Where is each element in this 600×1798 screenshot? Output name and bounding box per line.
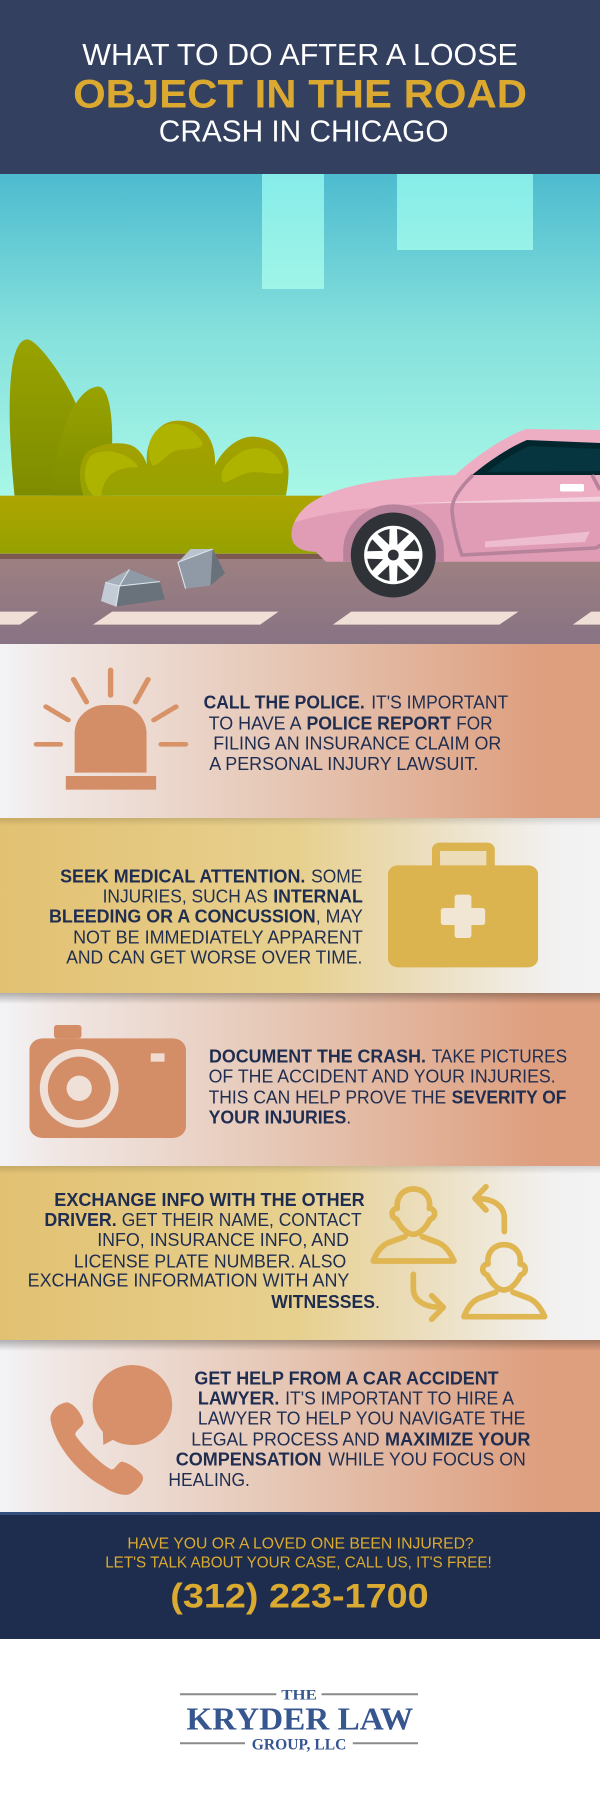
rock right xyxy=(178,549,225,589)
panel: seek medical attention xyxy=(0,818,600,993)
rock left xyxy=(101,569,165,607)
text: document the crash: OF THE ACCIDENT AND YOUR INJURIES. xyxy=(209,1066,556,1086)
text: seek medical attention: , MAY xyxy=(316,906,363,926)
text: call the police xyxy=(204,692,508,774)
text: document the crash: TAKE PICTURES xyxy=(432,1046,567,1066)
text: seek medical attention: SEEK MEDICAL ATTENTION. xyxy=(60,866,305,886)
panel: document the crash xyxy=(0,993,600,1166)
logo: the kryder law group: GROUP, LLC xyxy=(252,1737,346,1754)
text: seek medical attention: INTERNAL xyxy=(273,886,363,906)
sky xyxy=(0,174,600,504)
panel: exchange info xyxy=(0,1166,600,1340)
text: document the crash: YOUR INJURIES xyxy=(209,1107,346,1127)
bush xyxy=(80,421,289,496)
text: get help from a lawyer: IT'S IMPORTANT TO HIRE A xyxy=(285,1388,514,1408)
text: get help from a lawyer: LAWYER TO HELP YOU NAVIGATE THE xyxy=(198,1408,525,1428)
road xyxy=(0,559,600,644)
text: get help from a lawyer xyxy=(168,1368,530,1490)
text: exchange info: GET THEIR NAME, CONTACT xyxy=(122,1210,362,1230)
text: call the police: FILING AN INSURANCE CLAIM OR xyxy=(213,733,501,753)
icon: siren xyxy=(36,670,186,790)
text: get help from a lawyer: GET HELP FROM A CAR ACCIDENT xyxy=(194,1368,499,1388)
text: seek medical attention: NOT BE IMMEDIATELY APPARENT xyxy=(73,927,363,947)
text: call the police: TO HAVE A xyxy=(209,713,302,733)
icon: camera xyxy=(29,1025,186,1138)
logo: the kryder law group: THE xyxy=(281,1688,317,1704)
illustration: road scene xyxy=(0,174,600,644)
curb xyxy=(0,554,600,559)
text: seek medical attention: SOME xyxy=(311,866,362,886)
text: seek medical attention: BLEEDING OR A CONCUSSION xyxy=(49,906,316,926)
icon: first aid kit xyxy=(388,843,538,967)
text: call the police: CALL THE POLICE. xyxy=(204,692,365,712)
tall leaf xyxy=(10,339,92,496)
icon: phone with speech bubble xyxy=(50,1365,172,1495)
sky light panel right xyxy=(397,174,533,250)
header panel xyxy=(0,0,600,174)
text: get help from a lawyer: LEGAL PROCESS AND xyxy=(191,1429,380,1449)
logo: the kryder law group: KRYDER LAW xyxy=(186,1700,413,1736)
title line 2: OBJECT IN THE ROAD xyxy=(73,73,527,117)
car door xyxy=(452,475,600,555)
text: exchange info: EXCHANGE INFO WITH THE OTHER xyxy=(54,1190,365,1210)
panel: call the police xyxy=(0,644,600,818)
title line 3: CRASH IN CHICAGO xyxy=(159,115,449,149)
text: get help from a lawyer: COMPENSATION xyxy=(176,1449,322,1469)
car windshield xyxy=(472,440,600,475)
text: exchange info xyxy=(28,1190,380,1312)
text: seek medical attention: INJURIES, SUCH AS xyxy=(103,886,268,906)
text: get help from a lawyer: WHILE YOU FOCUS ON xyxy=(328,1449,526,1469)
text: exchange info: WITNESSES xyxy=(271,1292,375,1312)
text: exchange info: INFO, INSURANCE INFO, AND xyxy=(97,1230,349,1250)
call to action line 1: HAVE YOU OR A LOVED ONE BEEN INJURED? xyxy=(127,1535,474,1552)
text: call the police: FOR xyxy=(456,713,492,733)
text: seek medical attention xyxy=(49,866,363,967)
grass strip xyxy=(0,496,600,554)
text: document the crash: SEVERITY OF xyxy=(452,1087,566,1107)
text: document the crash: DOCUMENT THE CRASH. xyxy=(209,1046,426,1066)
logo: the kryder law group xyxy=(180,1688,418,1754)
sky light panel left xyxy=(262,174,324,289)
text: call the police: POLICE REPORT xyxy=(306,713,451,733)
second leaf xyxy=(53,387,112,496)
text: exchange info: LICENSE PLATE NUMBER. ALSO xyxy=(74,1251,346,1271)
call to action line 2: LET'S TALK ABOUT YOUR CASE, CALL US, IT'S FREE! xyxy=(105,1554,492,1571)
panel: get help from a lawyer xyxy=(0,1340,600,1512)
text: exchange info: EXCHANGE INFORMATION WITH ANY xyxy=(28,1271,349,1291)
text: exchange info: . xyxy=(375,1292,380,1312)
text: seek medical attention: AND CAN GET WORSE OVER TIME. xyxy=(66,947,362,967)
text: get help from a lawyer: LAWYER. xyxy=(198,1388,279,1408)
text: call the police: IT'S IMPORTANT xyxy=(371,692,508,712)
phone number: (312) 223-1700 xyxy=(170,1577,429,1615)
car body xyxy=(292,429,600,562)
car wheel xyxy=(351,512,436,598)
icon: two people exchanging xyxy=(373,1187,545,1319)
text: document the crash: THIS CAN HELP PROVE THE xyxy=(209,1087,446,1107)
text: document the crash: . xyxy=(346,1107,351,1127)
text: get help from a lawyer: MAXIMIZE YOUR xyxy=(385,1429,530,1449)
road dashes xyxy=(0,612,600,625)
title line 1: WHAT TO DO AFTER A LOOSE xyxy=(82,38,518,72)
text: exchange info: DRIVER. xyxy=(44,1210,117,1230)
text: get help from a lawyer: HEALING. xyxy=(168,1470,250,1490)
text: document the crash xyxy=(209,1046,567,1127)
panel: call to action xyxy=(0,1512,600,1639)
text: call the police: A PERSONAL INJURY LAWSUIT. xyxy=(209,754,478,774)
